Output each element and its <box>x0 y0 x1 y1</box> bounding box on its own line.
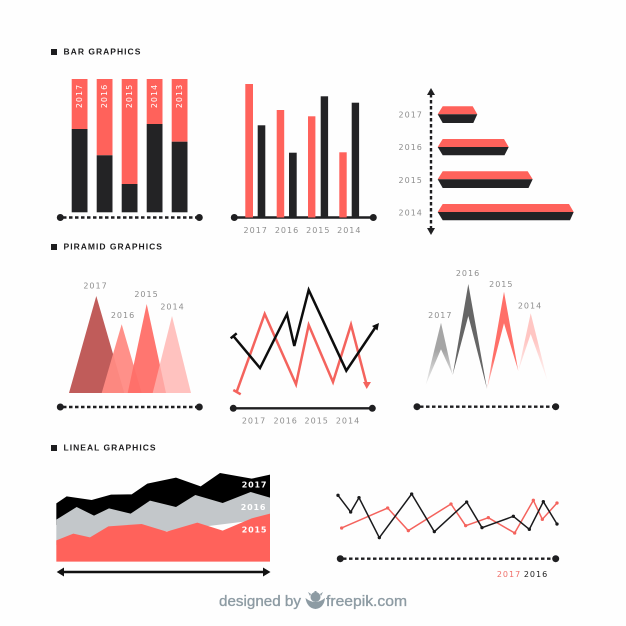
legend <box>497 570 548 579</box>
heading: lineal graphics: LINEAL GRAPHICS <box>64 443 157 453</box>
year labels: 2016 <box>456 269 480 278</box>
bar 2017 <box>438 106 477 123</box>
spike 2015 <box>487 292 518 389</box>
year labels <box>399 110 423 218</box>
year labels: 2017 <box>242 416 266 426</box>
panel: triangle chart <box>57 282 203 410</box>
area labels: 2016 <box>241 503 266 512</box>
red series <box>340 499 559 535</box>
panel: spike chart <box>414 269 559 410</box>
bar 2016 <box>97 79 112 212</box>
year labels: 2014 <box>160 302 185 312</box>
panel: grouped bar chart <box>231 84 377 235</box>
black line <box>231 290 379 371</box>
bar 2016: 2016 <box>100 84 109 108</box>
bars 2014 <box>339 103 359 218</box>
bar 2016 <box>438 139 509 155</box>
triangle 2014 <box>153 316 191 393</box>
footer: freepik credit: freepik.com <box>326 593 407 610</box>
year labels: 2015 <box>305 416 329 426</box>
area labels: 2017 <box>242 480 267 490</box>
panel: zigzag line chart <box>230 290 379 426</box>
axis <box>57 404 203 410</box>
year labels <box>83 282 185 320</box>
footer: freepik credit <box>219 591 407 610</box>
year labels: 2017 <box>399 110 423 120</box>
vertical arrow axis <box>427 88 435 235</box>
axis <box>230 405 376 412</box>
year labels: 2014 <box>336 416 360 426</box>
year labels: 2017 <box>244 226 268 235</box>
area 2015 <box>56 514 270 562</box>
panel: dotted line chart <box>336 492 559 579</box>
year labels <box>242 416 360 426</box>
bar 2015 <box>122 79 138 212</box>
bar 2015: 2015 <box>125 84 134 108</box>
axis <box>231 214 377 221</box>
year labels: 2016 <box>111 311 135 320</box>
axis <box>414 403 559 410</box>
axis <box>57 214 203 221</box>
year labels: 2016 <box>274 416 298 426</box>
year labels: 2015 <box>306 226 330 235</box>
bar 2015 <box>438 171 533 188</box>
bar 2017: 2017 <box>75 84 84 108</box>
axis <box>337 555 559 562</box>
heading: bar graphics: BAR GRAPHICS <box>64 47 141 57</box>
year labels: 2016 <box>275 226 299 235</box>
year labels: 2015 <box>134 290 159 299</box>
bar 2014 <box>438 204 574 220</box>
legend: 2017 <box>497 570 521 579</box>
area 2017 <box>56 473 270 525</box>
footer: freepik credit: designed by <box>219 593 301 610</box>
bar 2014: 2014 <box>150 84 159 108</box>
area labels: 2015 <box>242 526 267 534</box>
year labels <box>244 226 361 235</box>
year labels: 2016 <box>399 143 423 152</box>
bar 2014 <box>147 79 162 212</box>
year labels <box>428 269 542 320</box>
panel: horizontal bars <box>399 88 574 235</box>
icon: freepik crown <box>306 591 325 609</box>
year labels: 2015 <box>399 176 423 185</box>
panel: area chart <box>56 473 270 576</box>
year labels: 2014 <box>399 208 423 218</box>
year labels: 2014 <box>337 226 361 235</box>
area 2016 <box>56 492 270 545</box>
black series <box>336 492 559 539</box>
spike 2014 <box>518 313 548 382</box>
bars 2017 <box>245 84 265 218</box>
triangle 2015 <box>128 304 166 393</box>
bar 2013 <box>172 79 188 212</box>
triangle 2016 <box>102 324 142 393</box>
bars 2016 <box>277 110 297 218</box>
heading: piramid graphics: PIRAMID GRAPHICS <box>64 242 163 252</box>
double arrow <box>57 568 271 576</box>
bar 2017 <box>72 79 88 212</box>
panel: stacked bar chart <box>57 79 203 221</box>
spike 2016 <box>453 284 487 389</box>
year labels: 2015 <box>489 280 513 289</box>
area labels <box>241 480 267 534</box>
triangle 2017 <box>69 296 124 393</box>
bars 2015 <box>308 96 328 218</box>
year labels: 2017 <box>83 282 108 290</box>
year labels: 2014 <box>518 302 542 310</box>
legend: 2016 <box>524 570 548 579</box>
bar 2013: 2013 <box>175 84 184 108</box>
red line <box>233 314 371 394</box>
year labels: 2017 <box>428 311 452 320</box>
spike 2017 <box>426 323 453 385</box>
